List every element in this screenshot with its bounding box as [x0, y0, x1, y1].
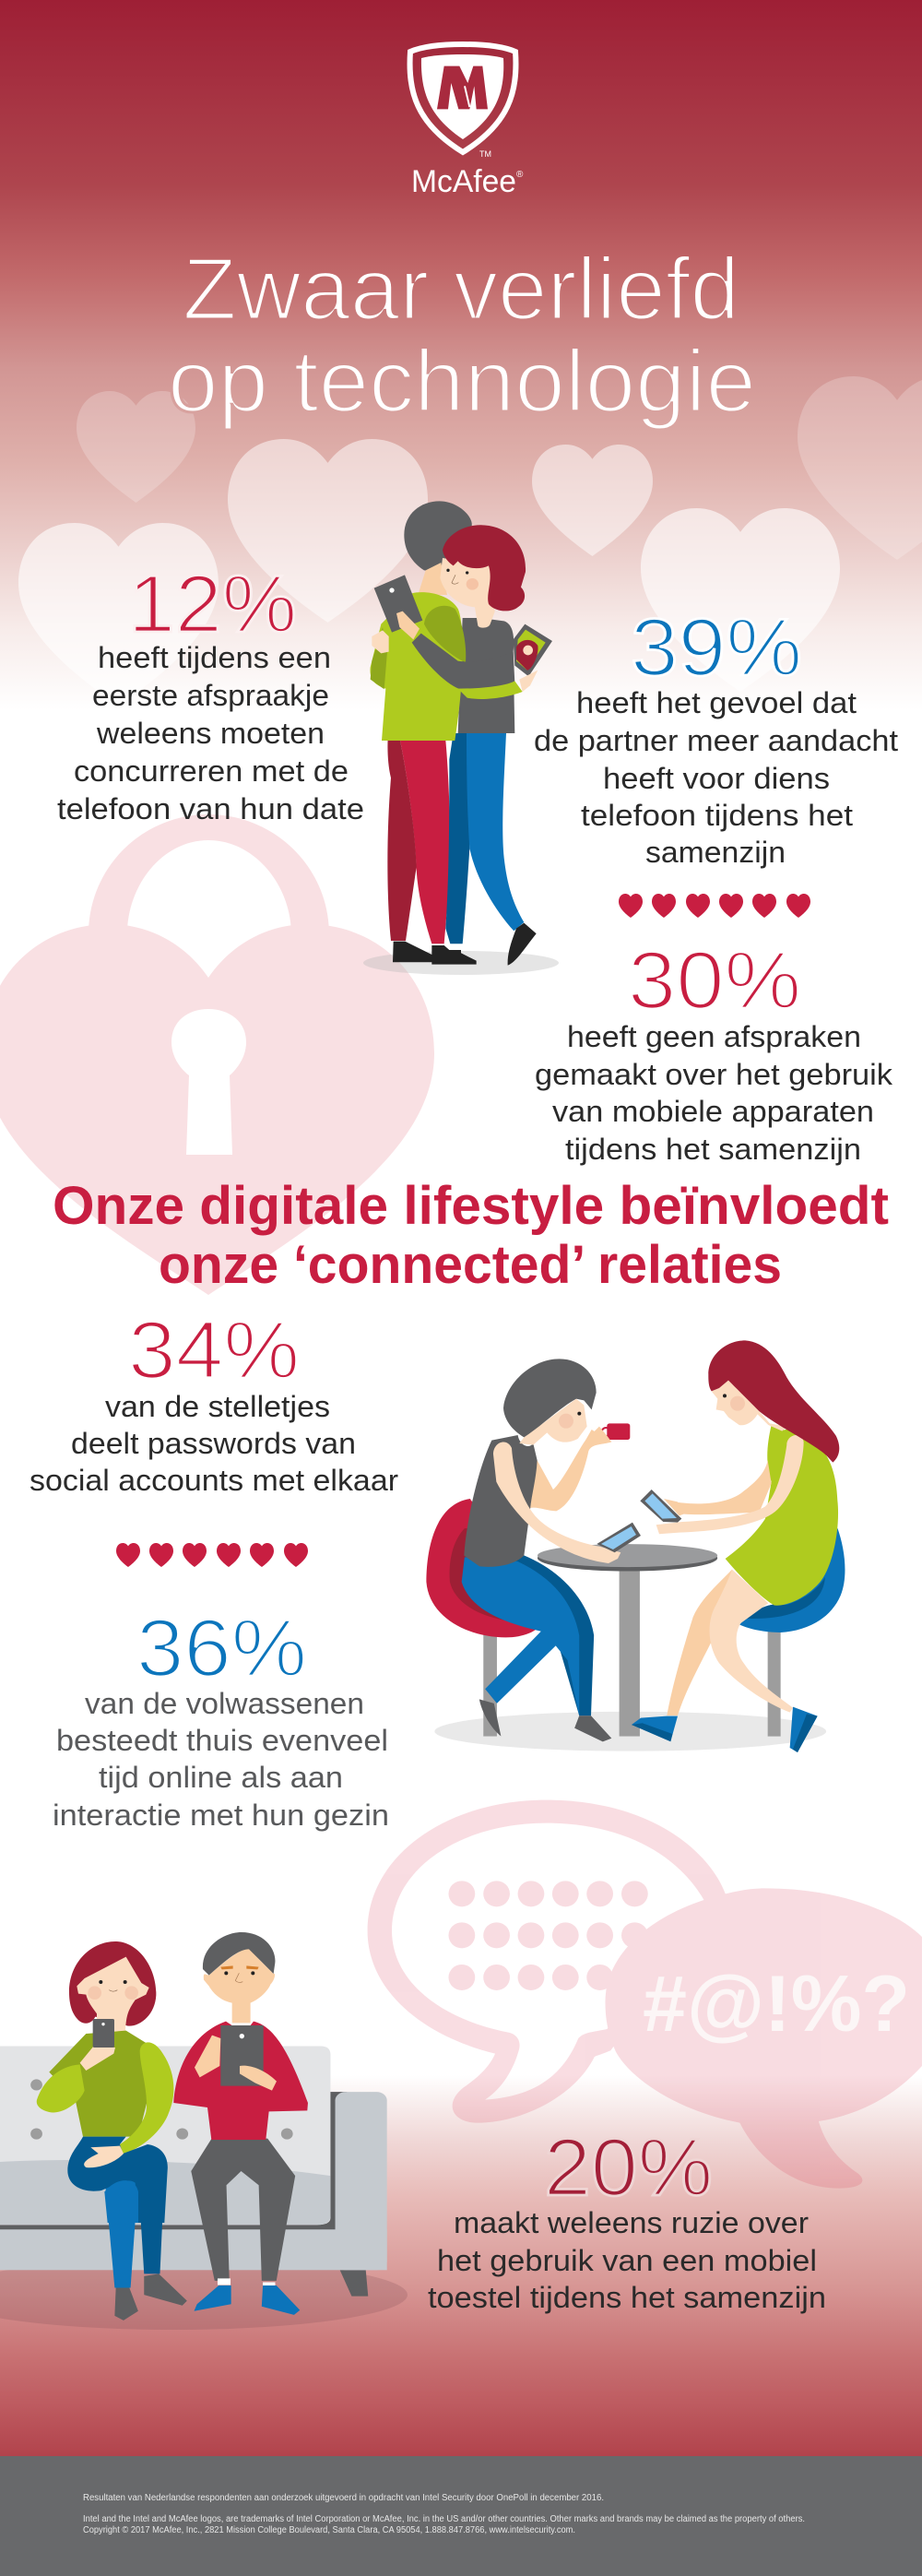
cafe furniture and left person legs [426, 1499, 826, 1751]
stat: 34% [30, 1304, 398, 1497]
description: eerste afspraakje [92, 679, 329, 712]
illustration: couple on sofa [0, 1932, 408, 2330]
title [168, 240, 756, 431]
description: heeft het gevoel dat [576, 686, 857, 719]
stat: 30% [535, 934, 893, 1166]
description: social accounts met elkaar [30, 1464, 398, 1497]
man upper body [173, 1932, 308, 2140]
icon: padlock heart [0, 814, 434, 1295]
footer text: Intel and the Intel and McAfee logos, are trademarks of Intel Corporation or McAfee, Inc. in the US and/or other countries. Other marks and brands may be claimed as the property of others. [83, 2514, 805, 2524]
percentage: 39% [631, 601, 802, 693]
description [535, 1020, 893, 1166]
icon: speech bubbles [368, 1800, 922, 2189]
description: van mobiele apparaten [552, 1095, 874, 1128]
shield [410, 44, 515, 152]
percentage: 12% [128, 558, 297, 649]
description [57, 641, 364, 825]
description: van de volwassenen [85, 1687, 364, 1720]
icon: row of hearts [619, 894, 810, 918]
section heading: onze ‘connected’ relaties [159, 1235, 782, 1295]
description: tijd online als aan [99, 1761, 343, 1794]
section heading: Onze digitale lifestyle beïnvloedt [53, 1176, 889, 1236]
description: heeft geen afspraken [567, 1020, 861, 1053]
footer text: Copyright © 2017 McAfee, Inc., 2821 Mission College Boulevard, Santa Clara, CA 95054, 1.888.847.8766, www.intelsecurity.com. [83, 2525, 575, 2535]
McAfee logo [410, 44, 524, 199]
percentage: 20% [544, 2121, 713, 2213]
sofa [0, 2047, 408, 2330]
icon: row of hearts [116, 1543, 308, 1567]
speech dots [448, 1881, 648, 1990]
right person [632, 1340, 845, 1752]
TM: TM [479, 149, 491, 159]
left speech bubble [368, 1800, 726, 2123]
footer band [0, 2456, 922, 2576]
illustration: hugging couple [363, 501, 559, 975]
stat: 12% [57, 558, 364, 825]
shadow [363, 951, 559, 975]
description: de partner meer aandacht [534, 724, 898, 757]
right speech bubble [605, 1888, 922, 2189]
couple upper bodies [370, 501, 552, 741]
background hearts [18, 376, 922, 706]
description: telefoon van hun date [57, 792, 364, 825]
left person upper body [464, 1359, 641, 1567]
symbols in bubble: #@!%? [643, 1960, 910, 2048]
description: maakt weleens ruzie over [454, 2206, 809, 2239]
description: interactie met hun gezin [53, 1798, 389, 1832]
description: tijdens het samenzijn [565, 1133, 861, 1166]
description: heeft voor diens [603, 762, 830, 795]
registered mark: ® [516, 170, 524, 180]
description: het gebruik van een mobiel [437, 2244, 817, 2277]
description: heeft tijdens een [98, 641, 331, 674]
woman upper body [37, 1941, 173, 2223]
description: gemaakt over het gebruik [535, 1058, 893, 1091]
title: Zwaar verliefd [183, 240, 739, 338]
footer text: Resultaten van Nederlandse respondenten aan onderzoek uitgevoerd in opdracht van Intel Security door OnePoll in december 2016. [83, 2493, 604, 2503]
stat: 36% [53, 1602, 389, 1832]
description: van de stelletjes [105, 1390, 330, 1423]
illustration: couple at table [426, 1340, 845, 1752]
title: op technologie [168, 332, 756, 431]
section heading [53, 1176, 889, 1295]
description: besteedt thuis evenveel [56, 1724, 388, 1757]
couple legs [387, 733, 537, 966]
description: concurreren met de [74, 754, 349, 788]
description [53, 1687, 389, 1832]
footer text [83, 2493, 805, 2535]
description [534, 686, 898, 869]
description: samenzijn [645, 836, 786, 869]
description: deelt passwords van [71, 1427, 356, 1460]
percentage: 30% [628, 934, 801, 1026]
description [428, 2206, 826, 2314]
stat: 20% [428, 2121, 826, 2314]
description: telefoon tijdens het [581, 799, 853, 832]
description: toestel tijdens het samenzijn [428, 2281, 826, 2314]
percentage: 34% [128, 1304, 300, 1395]
percentage: 36% [136, 1602, 307, 1693]
wordmark: McAfee [411, 164, 516, 199]
stat: 39% [534, 601, 898, 869]
description: weleens moeten [96, 717, 325, 750]
description [30, 1390, 398, 1497]
